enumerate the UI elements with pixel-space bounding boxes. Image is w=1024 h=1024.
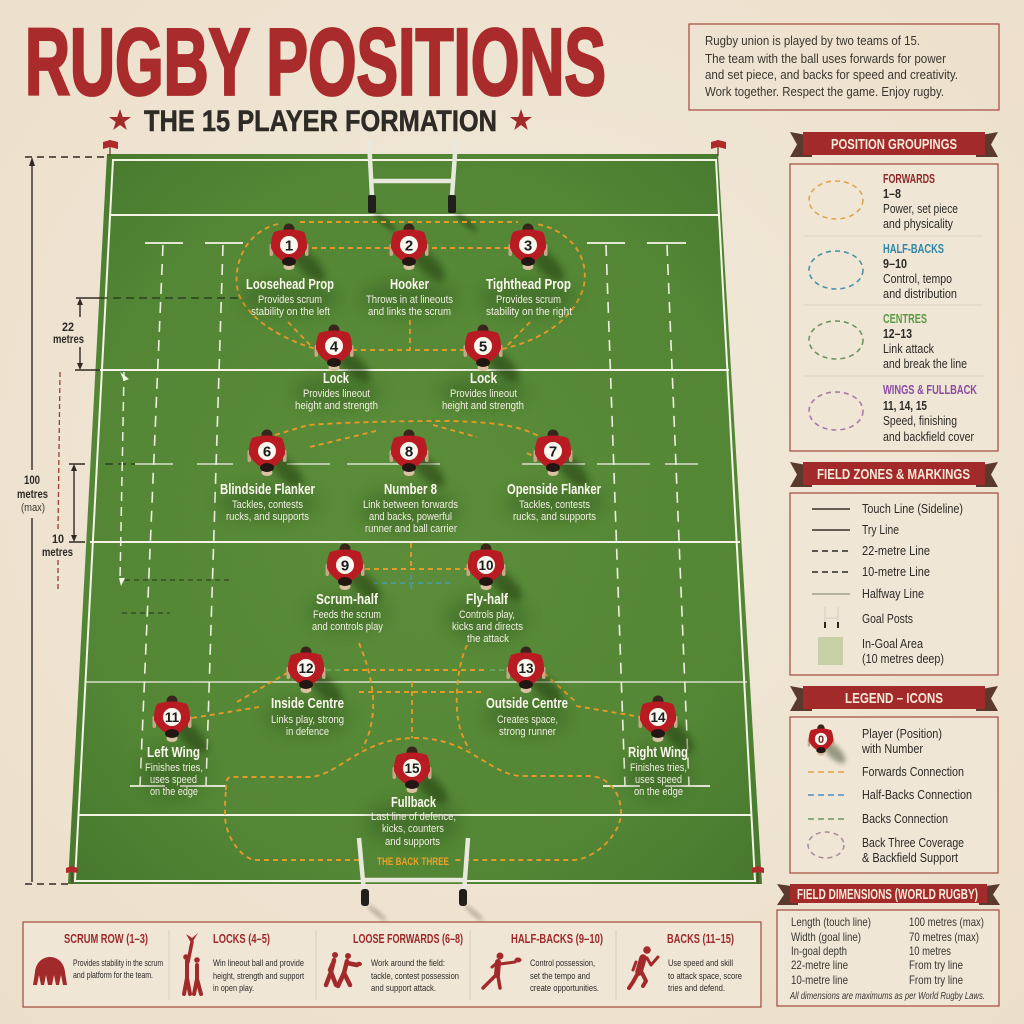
player 7: Openside Flanker: 7 [549,444,557,460]
player 2: Hooker [366,224,453,318]
player 4: Lock: 4 [330,338,339,356]
banner: field dimensions [777,884,1000,905]
panel: field dimensions: From try line [909,958,963,972]
player 9: Scrum-half: Scrum-half [316,591,379,608]
dimension arrows: 22 metres [53,298,100,370]
player 6: Blindside Flanker: rucks, and supports [226,511,309,523]
intro text box: Work together. Respect the game. Enjoy rugby. [705,85,944,99]
dimension arrows: 100 metres: metres [17,487,48,501]
player 11: Left Wing [145,696,213,798]
group: loose forwards: tackle, contest possession [371,971,459,982]
player 3: Tighthead Prop: Provides scrum [496,294,561,306]
player 8: Number 8: runner and ball carrier [365,523,457,535]
group: locks: Win lineout ball and provide [213,958,304,969]
connection lines: THE BACK THREE [377,856,449,868]
panel: field dimensions [777,910,999,1006]
panel: legend icons: with Number [861,741,924,756]
label shadows [141,280,690,846]
group: half-backs: set the tempo and [530,971,590,982]
panel: position groupings: Speed, finishing [883,413,957,428]
player 2: Hooker: Hooker [390,276,429,293]
subtitle with stars: THE 15 PLAYER FORMATION [144,105,497,138]
panel: field dimensions: From try line [909,973,963,987]
player 5: Lock: Provides lineout [450,388,517,400]
group: locks: LOCKS (4–5) [213,931,270,946]
top goal posts [368,140,479,234]
panel: position groupings: Power, set piece [883,201,958,216]
panel: legend icons: Player (Position) [862,726,942,741]
panel: position groupings: HALF-BACKS [883,242,944,256]
player 11: Left Wing: Left Wing [147,744,200,761]
player 8: Number 8: 8 [405,444,413,460]
panel: position groupings: and backfield cover [883,429,975,444]
panel: legend icons: Backs Connection [862,811,948,826]
bottom goal posts [359,838,485,923]
player 6: Blindside Flanker [220,430,315,523]
panel: position groupings: WINGS & FULLBACK [883,383,977,397]
player 14: Right Wing: Finishes tries, [630,762,687,774]
panel: position groupings: Link attack [883,341,934,356]
panel: position groupings: and distribution [883,286,957,301]
panel: field zones and markings: Touch Line (Sideline) [862,501,963,516]
player 9: Scrum-half: Feeds the scrum [313,609,381,621]
player 15: Fullback [371,746,456,848]
dimension arrows: 22 metres: metres [53,332,84,346]
player 2: Hooker: and links the scrum [368,306,451,318]
player 11: Left Wing: on the edge [150,786,198,798]
banner: legend icons: LEGEND – ICONS [845,690,943,707]
player 6: Blindside Flanker: 6 [263,444,271,460]
player 7: Openside Flanker: rucks, and supports [513,511,596,523]
player 2: Hooker: Throws in at lineouts [366,294,453,306]
player 1: Loosehead Prop: 1 [285,238,293,254]
player 8: Number 8 [363,430,458,535]
player 11: Left Wing: Finishes tries, [145,762,203,774]
player 1: Loosehead Prop [246,224,334,318]
panel: field zones and markings: Goal Posts [862,611,913,626]
player 15: Fullback: and supports [385,836,440,848]
panel: field dimensions: 10 metres [909,944,951,958]
player 10: Fly-half [452,544,527,645]
dimension arrows: 100 metres [17,157,105,884]
player 12: Inside Centre: 12 [298,661,314,676]
panel: position groupings [790,164,998,451]
dimension arrows: 10 metres: 10 [52,532,64,546]
panel: field dimensions: 10-metre line [791,973,848,987]
player 4: Lock: Provides lineout [303,388,370,400]
group: scrum row [33,931,163,985]
player 4: Lock: Lock [323,370,349,387]
group: backs: BACKS (11–15) [667,931,734,946]
group: loose forwards: and support attack. [371,983,436,994]
panel: position groupings: and break the line [883,356,967,371]
player 9: Scrum-half [312,544,386,633]
panel: field dimensions: 70 metres (max) [909,930,979,944]
title: RUGBY POSITIONS [25,10,606,116]
player 1: Loosehead Prop: Loosehead Prop [246,276,334,293]
player 15: Fullback: 15 [404,761,420,776]
player 3: Tighthead Prop: 3 [524,238,532,254]
group: backs: Use speed and skill [668,958,733,969]
dimension arrows: 10 metres: metres [42,545,73,559]
player 7: Openside Flanker: Openside Flanker [507,481,601,498]
group: locks: height, strength and support [213,971,304,982]
intro text box: The team with the ball uses forwards for power [705,52,946,66]
player 14: Right Wing [628,696,699,798]
player 5: Lock: height and strength [442,400,524,412]
player 9: Scrum-half: 9 [341,558,349,574]
player 10: Fly-half: 10 [478,558,494,573]
panel: position groupings: CENTRES [883,312,927,326]
panel: field dimensions: In-goal depth [791,944,847,958]
panel: field dimensions: 100 metres (max) [909,915,984,929]
group: backs: tries and defend. [668,983,725,994]
group: loose forwards [326,931,463,994]
player 10: Fly-half: Fly-half [466,591,509,608]
panel: position groupings: 1–8 [883,186,901,201]
player 10: Fly-half: Controls play, [459,609,515,621]
player 1: Loosehead Prop: stability on the left [251,306,330,318]
panel: field zones and markings: Halfway Line [862,586,924,601]
player 10: Fly-half: kicks and directs [452,621,523,633]
panel: legend icons [790,717,998,873]
panel: field zones and markings: (10 metres deep) [862,651,944,666]
player 15: Fullback: kicks, counters [382,823,444,835]
group: locks: in open play. [213,983,254,994]
player 7: Openside Flanker [507,430,601,523]
group: loose forwards: LOOSE FORWARDS (6–8) [353,931,463,946]
player 10: Fly-half: the attack [467,633,509,645]
player 15: Fullback: Last line of defence, [371,811,456,823]
banner: field zones and markings: FIELD ZONES & MARKINGS [817,466,970,483]
panel: field zones and markings: 10-metre Line [862,564,930,579]
player 13: Outside Centre [486,646,568,738]
player 11: Left Wing: uses speed [150,774,197,786]
rugby field [60,150,770,890]
player 8: Number 8: and backs, powerful [369,511,452,523]
group: half-backs [483,931,603,994]
player 9: Scrum-half: and controls play [312,621,383,633]
panel: legend icons: Forwards Connection [862,764,964,779]
player 15: Fullback: Fullback [391,794,436,811]
player 12: Inside Centre: Inside Centre [271,695,344,712]
corner flags [66,140,764,884]
player 2: Hooker: 2 [405,238,413,254]
panel: position groupings: 9–10 [883,256,907,271]
group: half-backs: HALF-BACKS (9–10) [511,931,603,946]
group: half-backs: Control possession, [530,958,595,969]
player 6: Blindside Flanker: Blindside Flanker [220,481,315,498]
player 13: Outside Centre: Creates space, [497,714,558,726]
dimension arrows: 10 metres [42,372,85,592]
group: backs [629,931,742,994]
panel: position groupings: 12–13 [883,326,912,341]
group: loose forwards: Work around the field: [371,958,445,969]
panel: field zones and markings [790,493,998,675]
player 4: Lock [295,324,378,412]
panel: field dimensions: Length (touch line) [791,915,871,929]
player 13: Outside Centre: 13 [518,661,534,676]
group: backs: to attack space, score [668,971,742,982]
panel: legend icons: Half-Backs Connection [862,787,972,802]
banner: position groupings [790,132,998,157]
panel: field zones and markings: 22-metre Line [862,543,930,558]
banner: position groupings: POSITION GROUPINGS [831,136,957,153]
player 1: Loosehead Prop: Provides scrum [258,294,322,306]
player 14: Right Wing: on the edge [634,786,683,798]
panel: field dimensions: 22-metre line [791,958,848,972]
player 14: Right Wing: 14 [650,710,666,725]
player 3: Tighthead Prop: stability on the right [486,306,572,318]
player 5: Lock: 5 [479,338,487,356]
banner: field zones and markings [790,462,998,487]
player 14: Right Wing: uses speed [635,774,682,786]
player 5: Lock [442,324,524,412]
dimension arrows: 22 metres: 22 [62,320,74,334]
group: scrum row: Provides stability in the scrum [73,958,163,969]
group: locks [183,931,304,994]
intro text box: Rugby union is played by two teams of 15. [705,34,920,48]
player 6: Blindside Flanker: Tackles, contests [232,499,303,511]
panel: position groupings: 11, 14, 15 [883,398,927,413]
panel: field zones and markings: Try Line [862,522,899,537]
intro text box [689,24,999,110]
banner: legend icons [790,686,998,711]
player 12: Inside Centre: in defence [286,726,329,738]
player 3: Tighthead Prop: Tighthead Prop [486,276,571,293]
player 5: Lock: Lock [470,370,498,387]
panel: position groupings: Control, tempo [883,271,952,286]
group: scrum row: SCRUM ROW (1–3) [64,931,148,946]
player 8: Number 8: Link between forwards [363,499,458,511]
dimension arrows: 100 metres: (max) [21,502,45,514]
connection lines [192,222,641,868]
panel: field zones and markings: In-Goal Area [862,636,924,651]
player 7: Openside Flanker: Tackles, contests [519,499,590,511]
panel: position groupings: FORWARDS [883,172,935,186]
player 13: Outside Centre: strong runner [499,726,556,738]
group: scrum row: and platform for the team. [73,970,153,981]
panel: position groupings: and physicality [883,216,953,231]
player 12: Inside Centre [271,646,347,738]
panel: field dimensions: Width (goal line) [791,930,861,944]
dimension arrows: 100 metres: 100 [24,473,40,487]
player 4: Lock: height and strength [295,400,378,412]
intro text box: and set piece, and backs for speed and creativity. [705,68,958,82]
group: half-backs: create opportunities. [530,983,599,994]
panel: legend icons: 0 [818,734,824,746]
panel: legend icons: & Backfield Support [862,850,958,865]
player 8: Number 8: Number 8 [384,481,437,498]
player 13: Outside Centre: Outside Centre [486,695,568,712]
player 14: Right Wing: Right Wing [628,744,688,761]
player 3: Tighthead Prop [486,224,572,318]
panel: player groups strip [23,922,761,1007]
player 11: Left Wing: 11 [165,710,180,725]
panel: legend icons: Back Three Coverage [862,835,964,850]
player 12: Inside Centre: Links play, strong [271,714,344,726]
